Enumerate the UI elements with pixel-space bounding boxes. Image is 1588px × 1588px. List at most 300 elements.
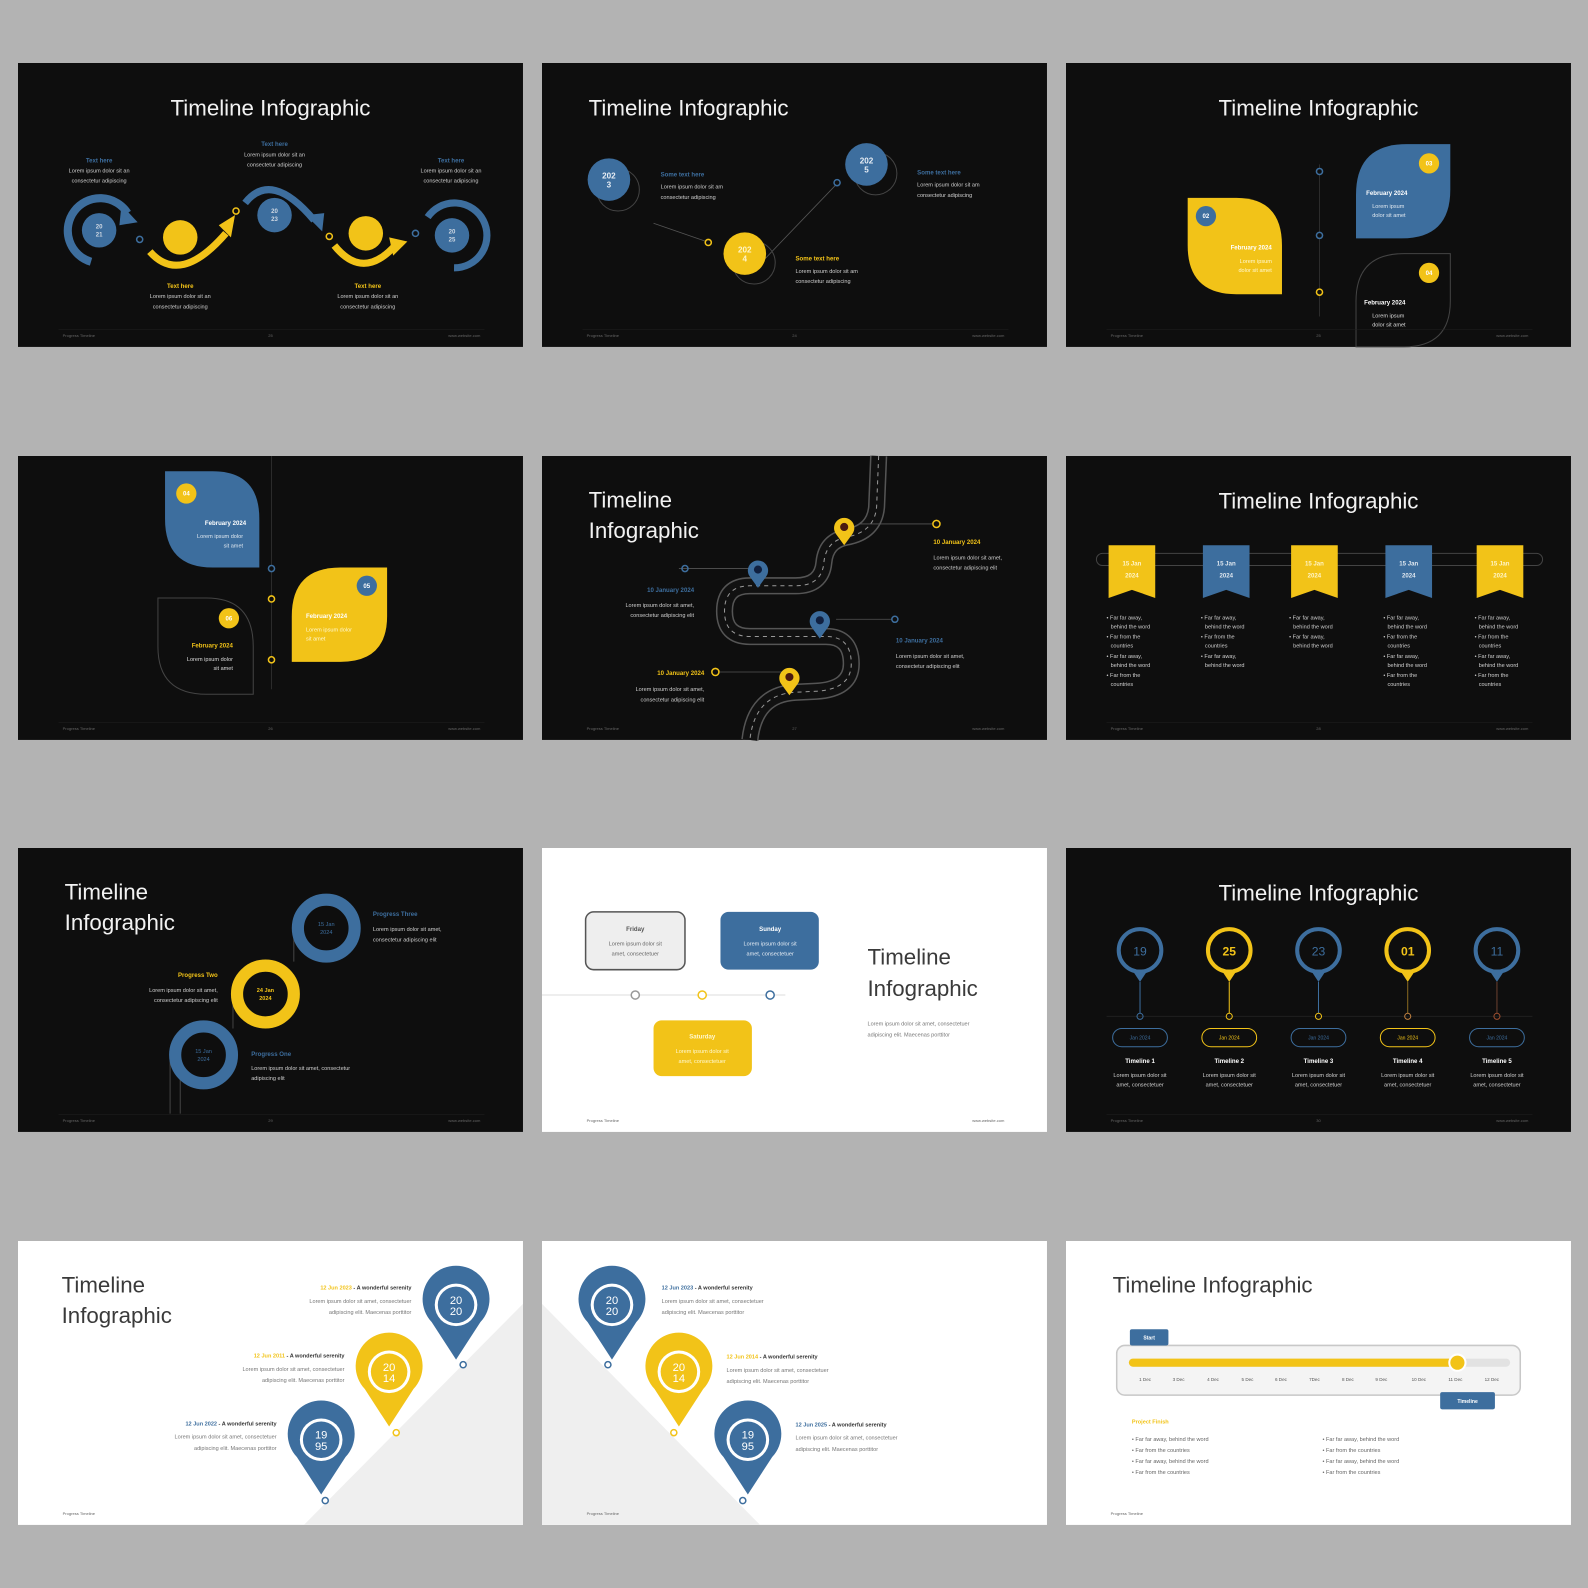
title: Timeline bbox=[65, 880, 148, 905]
ribbons: 15 Jan bbox=[1399, 561, 1418, 568]
pin 5: Lorem ipsum dolor sit bbox=[1470, 1073, 1524, 1079]
text blocks: adipiscing elit. Maecenas porttitor bbox=[329, 1310, 412, 1316]
text blocks: 12 Jun 2022 - A wonderful serenity bbox=[185, 1422, 277, 1428]
title: Timeline Infographic bbox=[1219, 881, 1418, 906]
text blocks: Text here bbox=[86, 157, 113, 164]
pin 1: 19 bbox=[1133, 944, 1147, 958]
pin 3: Jan 2024 bbox=[1308, 1036, 1329, 1042]
title: Timeline bbox=[62, 1273, 145, 1298]
blue leaf 03: dolor sit amet bbox=[1372, 213, 1406, 219]
pin 3 bbox=[1291, 929, 1346, 1088]
slider: 3 Dec bbox=[1173, 1377, 1185, 1382]
connector lines bbox=[679, 524, 932, 672]
blue leaf 04: Lorem ipsum dolor bbox=[197, 534, 243, 540]
bullet texts: countries bbox=[1205, 644, 1228, 650]
circle 3: 5 bbox=[864, 166, 869, 175]
bullet texts: • Far from the bbox=[1475, 635, 1508, 641]
tag start bbox=[1130, 1329, 1168, 1345]
project finish bullets: • Far far away, behind the word bbox=[1323, 1437, 1399, 1443]
project finish bullets bbox=[1132, 1420, 1399, 1476]
text blocks: Lorem ipsum dolor sit amet, bbox=[625, 603, 695, 609]
text blocks: consectetur adipiscing bbox=[917, 193, 972, 199]
slide 4: leaf shapes continued bbox=[18, 456, 523, 740]
yellow leaf 05: 05 bbox=[363, 583, 371, 590]
text blocks: consectetur adipiscing elit bbox=[933, 566, 998, 572]
text blocks: Lorem ipsum dolor sit amet, consectetuer bbox=[662, 1299, 764, 1305]
title: Timeline Infographic bbox=[589, 96, 789, 121]
slide 1: circular arrows timeline bbox=[18, 63, 523, 347]
pin 5: Jan 2024 bbox=[1487, 1036, 1508, 1042]
slider: 7Dec bbox=[1309, 1377, 1320, 1382]
text blocks: Progress Three bbox=[373, 911, 418, 918]
text blocks: consectetur adipiscing elit bbox=[373, 937, 437, 943]
bullet texts: behind the word bbox=[1293, 644, 1333, 650]
pin 2020 bbox=[423, 1266, 490, 1368]
step 4 yellow bbox=[334, 216, 419, 263]
footer: www.website.com bbox=[972, 726, 1005, 731]
pins bbox=[748, 518, 854, 695]
bullet texts: behind the word bbox=[1111, 624, 1150, 630]
title: Timeline Infographic bbox=[1113, 1273, 1313, 1298]
text blocks: 12 Jun 2014 - A wonderful serenity bbox=[727, 1355, 819, 1361]
pin 1995 bbox=[714, 1401, 781, 1504]
footer: 29 bbox=[268, 1118, 273, 1123]
dots bbox=[631, 991, 774, 999]
outline leaf 04: Lorem ipsum bbox=[1372, 314, 1405, 320]
timeline line bbox=[542, 994, 785, 996]
blue leaf 03 bbox=[1356, 144, 1450, 238]
bullet texts: • Far far away, bbox=[1107, 615, 1143, 621]
title bbox=[589, 488, 699, 543]
box Sunday: Lorem ipsum dolor sit bbox=[744, 941, 797, 947]
text blocks: Lorem ipsum dolor sit an bbox=[244, 152, 305, 158]
footer: Progress Timeline bbox=[63, 1511, 96, 1516]
footer bbox=[587, 726, 1005, 731]
yellow leaf 05: sit amet bbox=[306, 637, 326, 643]
pin 4: Jan 2024 bbox=[1397, 1036, 1418, 1042]
slide 11: map pins (white, left) bbox=[542, 1241, 1047, 1525]
bullet texts: countries bbox=[1479, 682, 1501, 688]
slider: 9 Dec bbox=[1375, 1377, 1388, 1382]
footer: 30 bbox=[1316, 1118, 1321, 1123]
yellow leaf 05 bbox=[292, 568, 387, 662]
pin 2: 25 bbox=[1222, 944, 1236, 958]
pin 2020 bbox=[579, 1266, 645, 1368]
step 3 blue: 20 bbox=[271, 208, 279, 215]
text blocks: Text here bbox=[167, 283, 194, 290]
bullet texts: behind the word bbox=[1387, 663, 1427, 669]
pin 3: Lorem ipsum dolor sit bbox=[1292, 1073, 1346, 1079]
ribbons: 2024 bbox=[1402, 573, 1416, 580]
ribbons: 2024 bbox=[1219, 573, 1234, 580]
text blocks: Progress One bbox=[251, 1051, 292, 1058]
yellow leaf 02: Lorem ipsum bbox=[1240, 259, 1272, 265]
yellow leaf 02: February 2024 bbox=[1231, 245, 1272, 252]
bar bbox=[1096, 553, 1543, 566]
bullet texts: countries bbox=[1111, 644, 1133, 650]
pin 1: amet, consectetuer bbox=[1116, 1082, 1164, 1088]
text blocks: Lorem ipsum dolor sit an bbox=[150, 294, 211, 300]
bullet texts: • Far from the bbox=[1107, 673, 1140, 679]
outline leaf 04: 04 bbox=[1426, 270, 1433, 277]
project finish bullets: • Far from the countries bbox=[1132, 1448, 1190, 1454]
bullet texts: • Far from the bbox=[1383, 673, 1417, 679]
step 1 blue ring: 20 bbox=[96, 223, 103, 230]
footer: 25 bbox=[268, 333, 273, 338]
footer: 24 bbox=[792, 333, 797, 338]
step 3 blue: 23 bbox=[271, 216, 279, 223]
pin 4: Timeline 4 bbox=[1393, 1058, 1423, 1065]
bullet texts bbox=[1107, 615, 1518, 688]
bullet texts: • Far far away, bbox=[1475, 654, 1511, 660]
footer: Progress Timeline bbox=[1111, 1511, 1144, 1516]
slide 2: connected circles bbox=[542, 63, 1047, 347]
text blocks: Lorem ipsum dolor sit amet, consectetuer bbox=[727, 1368, 829, 1374]
bullet texts: • Far far away, bbox=[1383, 654, 1419, 660]
text blocks: adipiscing elit. Maecenas porttitor bbox=[262, 1378, 345, 1384]
footer: Progress Timeline bbox=[587, 333, 620, 338]
slider: 1 Dec bbox=[1139, 1377, 1152, 1382]
footer: Progress Timeline bbox=[587, 1118, 620, 1123]
box Saturday: Saturday bbox=[689, 1034, 716, 1041]
text blocks: consectetur adipiscing bbox=[72, 179, 127, 185]
footer: www.website.com bbox=[972, 333, 1005, 338]
text blocks: Text here bbox=[355, 283, 382, 290]
box Sunday: Sunday bbox=[759, 926, 782, 933]
project finish bullets: • Far from the countries bbox=[1323, 1470, 1381, 1476]
pin 5 bbox=[1470, 929, 1524, 1088]
text blocks: Lorem ipsum dolor sit amet, consectetuer bbox=[309, 1299, 412, 1305]
bullet texts: • Far far away, bbox=[1289, 635, 1325, 641]
footer: 27 bbox=[792, 726, 797, 731]
footer: 26 bbox=[268, 726, 273, 731]
box Friday: Lorem ipsum dolor sit bbox=[609, 941, 662, 947]
pin 2: amet, consectetuer bbox=[1206, 1082, 1253, 1088]
footer: www.website.com bbox=[1496, 333, 1529, 338]
bullet texts: • Far from the bbox=[1107, 635, 1140, 641]
connector lines bbox=[654, 185, 836, 259]
yellow leaf 05: February 2024 bbox=[306, 613, 348, 620]
rings bbox=[175, 900, 355, 1083]
footer: www.website.com bbox=[448, 1118, 481, 1123]
footer: Progress Timeline bbox=[587, 1511, 620, 1516]
text blocks: consectetur adipiscing bbox=[423, 179, 479, 185]
bullet texts: • Far far away, bbox=[1383, 615, 1419, 621]
pin 1995: 19 bbox=[742, 1430, 754, 1442]
box Friday: amet, consectetuer bbox=[612, 951, 659, 957]
text blocks: consectetur adipiscing elit bbox=[641, 697, 705, 703]
bullet texts: • Far from the bbox=[1201, 635, 1235, 641]
pin 2020: 20 bbox=[450, 1295, 462, 1307]
project finish bullets: Project Finish bbox=[1132, 1420, 1169, 1426]
footer: www.website.com bbox=[972, 1118, 1005, 1123]
footer bbox=[587, 1118, 1005, 1123]
text blocks: Lorem ipsum dolor sit amet, bbox=[896, 654, 965, 660]
step 3 blue bbox=[245, 190, 332, 239]
footer: Progress Timeline bbox=[1111, 1118, 1144, 1123]
pin 4: 01 bbox=[1401, 944, 1415, 958]
outline leaf 06: sit amet bbox=[213, 666, 233, 672]
step 5 blue ring: 25 bbox=[449, 236, 456, 243]
outline leaf 04: dolor sit amet bbox=[1372, 323, 1406, 329]
footer: Progress Timeline bbox=[63, 726, 96, 731]
text blocks bbox=[69, 141, 481, 310]
title: Infographic bbox=[62, 1303, 172, 1328]
bullet texts: countries bbox=[1111, 682, 1133, 688]
text blocks: Some text here bbox=[796, 256, 840, 263]
title: Infographic bbox=[867, 976, 978, 1001]
circle 1: 202 bbox=[602, 172, 616, 181]
box Saturday: amet, consectetuer bbox=[679, 1059, 726, 1065]
pin 1: Jan 2024 bbox=[1130, 1036, 1151, 1042]
pin 2 bbox=[1202, 929, 1257, 1088]
slider: 5 Dec bbox=[1242, 1377, 1254, 1382]
title: Infographic bbox=[65, 910, 175, 935]
tag start: Start bbox=[1143, 1335, 1155, 1341]
pin 3: Timeline 3 bbox=[1304, 1058, 1334, 1065]
text blocks: Text here bbox=[438, 157, 465, 164]
text blocks: Lorem ipsum dolor sit am bbox=[661, 185, 723, 191]
footer bbox=[1107, 330, 1532, 338]
rings: 2024 bbox=[259, 996, 273, 1002]
text blocks: Some text here bbox=[917, 170, 961, 177]
text blocks: consectetur adipiscing bbox=[340, 304, 395, 310]
pin 2014: 20 bbox=[383, 1362, 395, 1374]
slider: 10 Dec bbox=[1412, 1377, 1427, 1382]
description: adipiscing elit. Maecenas porttitor bbox=[867, 1033, 950, 1039]
stair line bbox=[170, 929, 294, 1114]
text blocks: adipiscing elit. Maecenas porttitor bbox=[662, 1310, 744, 1316]
ribbons bbox=[1109, 545, 1523, 598]
slide 3: leaf shapes bbox=[1066, 63, 1571, 347]
footer: Progress Timeline bbox=[1111, 726, 1144, 731]
footer bbox=[59, 330, 484, 338]
rings: 15 Jan bbox=[318, 922, 335, 928]
text blocks: Lorem ipsum dolor sit an bbox=[337, 294, 398, 300]
title bbox=[867, 945, 978, 1001]
pin 2014 bbox=[356, 1333, 423, 1436]
box Friday bbox=[586, 912, 685, 970]
bullet texts: countries bbox=[1479, 644, 1501, 650]
text blocks: Lorem ipsum dolor sit amet, bbox=[933, 555, 1002, 561]
title bbox=[62, 1273, 172, 1328]
circle 2: 202 bbox=[738, 246, 752, 255]
text blocks: Some text here bbox=[661, 172, 705, 179]
circle 2 bbox=[705, 232, 775, 284]
footer bbox=[1107, 723, 1532, 731]
box Friday: Friday bbox=[626, 926, 645, 933]
text blocks: adipiscing elit bbox=[251, 1076, 285, 1082]
pin 3: amet, consectetuer bbox=[1295, 1082, 1342, 1088]
pin 1995: 95 bbox=[742, 1441, 754, 1453]
ribbons: 2024 bbox=[1125, 573, 1139, 580]
road bbox=[725, 456, 879, 740]
pin 3: 23 bbox=[1312, 944, 1325, 958]
project finish bullets: • Far from the countries bbox=[1132, 1470, 1190, 1476]
pin 4: amet, consectetuer bbox=[1384, 1082, 1432, 1088]
text blocks: consectetur adipiscing bbox=[153, 304, 208, 310]
step 5 blue ring bbox=[428, 203, 487, 268]
text blocks: consectetur adipiscing elit bbox=[154, 998, 218, 1004]
text blocks: Lorem ipsum dolor sit amet, consectetur bbox=[251, 1066, 350, 1072]
ribbons: 15 Jan bbox=[1491, 561, 1510, 568]
footer: Progress Timeline bbox=[587, 726, 620, 731]
ribbons: 2024 bbox=[1493, 573, 1507, 580]
text blocks: consectetur adipiscing bbox=[247, 162, 302, 168]
text blocks bbox=[625, 539, 1002, 703]
outline leaf 06: February 2024 bbox=[192, 643, 234, 650]
text blocks: Lorem ipsum dolor sit amet, bbox=[636, 687, 705, 693]
title: Timeline Infographic bbox=[1219, 489, 1418, 514]
text blocks: adipiscing elit. Maecenas porttitor bbox=[796, 1447, 878, 1453]
slider: 8 Dec bbox=[1342, 1377, 1355, 1382]
bullet texts: • Far far away, bbox=[1201, 615, 1237, 621]
box Sunday: amet, consectetuer bbox=[746, 951, 794, 957]
blue leaf 04: sit amet bbox=[224, 543, 244, 549]
slide 6: ribbons bbox=[1066, 456, 1571, 740]
pin 2020: 20 bbox=[450, 1306, 462, 1318]
vertical line with dots bbox=[1316, 164, 1323, 316]
description bbox=[867, 1021, 970, 1039]
pin 2014: 14 bbox=[383, 1373, 395, 1385]
pin 5: amet, consectetuer bbox=[1473, 1082, 1521, 1088]
outline leaf 04: February 2024 bbox=[1364, 299, 1406, 306]
step 2 yellow bbox=[150, 208, 239, 265]
footer: 25 bbox=[1316, 333, 1321, 338]
slide 5: winding road bbox=[542, 456, 1047, 740]
bullet texts: behind the word bbox=[1387, 624, 1427, 630]
slider: 12 Dec bbox=[1485, 1377, 1500, 1382]
box Saturday bbox=[654, 1020, 752, 1076]
yellow leaf 02 bbox=[1188, 198, 1282, 294]
footer bbox=[59, 723, 484, 731]
footer bbox=[1107, 1115, 1532, 1123]
bullet texts: • Far from the bbox=[1475, 673, 1508, 679]
text blocks: 10 January 2024 bbox=[933, 539, 981, 546]
slider: 6 Dec bbox=[1275, 1377, 1288, 1382]
yellow leaf 02: dolor sit amet bbox=[1238, 268, 1272, 274]
text blocks: Lorem ipsum dolor sit amet, consectetuer bbox=[242, 1367, 345, 1373]
text blocks: Lorem ipsum dolor sit amet, bbox=[373, 927, 442, 933]
bullet texts: • Far far away, bbox=[1107, 654, 1143, 660]
slide 8: day boxes (white) bbox=[542, 848, 1047, 1132]
circle 3 bbox=[834, 143, 897, 195]
text blocks: 12 Jun 2011 - A wonderful serenity bbox=[254, 1354, 345, 1360]
title: Timeline bbox=[867, 945, 951, 970]
pin 2: Timeline 2 bbox=[1214, 1058, 1245, 1065]
rings: 2024 bbox=[320, 930, 332, 936]
pin 5: 11 bbox=[1491, 944, 1503, 958]
dots bbox=[682, 520, 940, 676]
yellow leaf 02: 02 bbox=[1203, 213, 1210, 220]
pin 1 bbox=[1113, 929, 1167, 1088]
bullet texts: behind the word bbox=[1205, 663, 1245, 669]
box Sunday bbox=[720, 912, 819, 970]
pin 2014 bbox=[645, 1333, 712, 1436]
text blocks: adipiscing elit. Maecenas porttitor bbox=[194, 1446, 277, 1452]
text blocks: Lorem ipsum dolor sit amet, consectetuer bbox=[175, 1435, 277, 1441]
outline leaf 06 bbox=[158, 598, 253, 694]
blue leaf 04 bbox=[165, 471, 259, 568]
box Saturday: Lorem ipsum dolor sit bbox=[676, 1049, 729, 1055]
text blocks: 10 January 2024 bbox=[657, 670, 705, 677]
bullet texts: • Far far away, bbox=[1201, 654, 1237, 660]
slider: 4 Dec bbox=[1207, 1377, 1220, 1382]
ribbons: 15 Jan bbox=[1122, 561, 1142, 568]
text blocks: 12 Jun 2023 - A wonderful serenity bbox=[320, 1286, 412, 1292]
text blocks: 10 January 2024 bbox=[647, 587, 695, 594]
blue leaf 03: 03 bbox=[1426, 160, 1433, 167]
slider bbox=[1117, 1345, 1520, 1395]
footer: 28 bbox=[1316, 726, 1321, 731]
text blocks: Text here bbox=[261, 141, 288, 148]
pin 2014: 20 bbox=[673, 1362, 685, 1374]
outline leaf 04 bbox=[1356, 254, 1450, 347]
text blocks: consectetur adipiscing elit bbox=[896, 664, 960, 670]
bullet texts: • Far far away, bbox=[1289, 615, 1325, 621]
step 1 blue ring bbox=[68, 198, 143, 262]
slider: 11 Dec bbox=[1448, 1377, 1463, 1382]
project finish bullets: • Far far away, behind the word bbox=[1132, 1437, 1209, 1443]
pin 1995: 95 bbox=[315, 1441, 327, 1453]
text blocks: Lorem ipsum dolor sit an bbox=[421, 169, 481, 175]
circle 2: 4 bbox=[743, 255, 748, 264]
circle 1: 3 bbox=[607, 181, 612, 190]
bullet texts: behind the word bbox=[1111, 663, 1150, 669]
text blocks: Lorem ipsum dolor sit am bbox=[917, 183, 980, 189]
pin 1995: 19 bbox=[315, 1430, 327, 1442]
text blocks bbox=[149, 911, 442, 1082]
footer bbox=[583, 330, 1008, 338]
vertical line with dots bbox=[268, 456, 275, 689]
text blocks: 10 January 2024 bbox=[896, 638, 943, 645]
outline leaf 06: 06 bbox=[226, 615, 233, 622]
bullet texts: countries bbox=[1387, 682, 1410, 688]
text blocks: 12 Jun 2025 - A wonderful serenity bbox=[796, 1423, 887, 1429]
blue leaf 04: 04 bbox=[183, 491, 190, 498]
text blocks bbox=[661, 170, 980, 285]
tag timeline: Timeline bbox=[1457, 1399, 1478, 1405]
pin 2020: 20 bbox=[606, 1306, 618, 1318]
slide 10: map pins (white, right) bbox=[18, 1241, 523, 1525]
yellow leaf 05: Lorem ipsum dolor bbox=[306, 627, 352, 633]
blue leaf 03: Lorem ipsum bbox=[1372, 204, 1405, 210]
title bbox=[65, 880, 175, 935]
project finish bullets: • Far far away, behind the word bbox=[1323, 1459, 1399, 1465]
pin 4: Lorem ipsum dolor sit bbox=[1381, 1073, 1435, 1079]
title: Infographic bbox=[589, 518, 699, 543]
title: Timeline bbox=[589, 488, 672, 513]
rings: 2024 bbox=[197, 1057, 210, 1063]
text blocks bbox=[175, 1286, 412, 1452]
footer: www.website.com bbox=[1496, 1118, 1529, 1123]
slide 7: stacked rings bbox=[18, 848, 523, 1132]
pin 4 bbox=[1380, 929, 1435, 1088]
pin 1995 bbox=[288, 1401, 355, 1504]
ribbons: 15 Jan bbox=[1305, 561, 1324, 568]
pin 1: Timeline 1 bbox=[1125, 1058, 1155, 1065]
text blocks: Lorem ipsum dolor sit an bbox=[69, 169, 130, 175]
slide 12: slider timeline (white) bbox=[1066, 1241, 1571, 1525]
text blocks: Progress Two bbox=[178, 972, 218, 979]
bullet texts: • Far from the bbox=[1383, 635, 1417, 641]
footer: www.website.com bbox=[448, 333, 481, 338]
footer: www.website.com bbox=[1496, 726, 1529, 731]
outline leaf 06: Lorem ipsum dolor bbox=[187, 657, 233, 663]
text blocks: consectetur adipiscing bbox=[661, 195, 716, 201]
pin 2: Jan 2024 bbox=[1219, 1036, 1240, 1042]
text blocks: Lorem ipsum dolor sit amet, bbox=[149, 988, 218, 994]
